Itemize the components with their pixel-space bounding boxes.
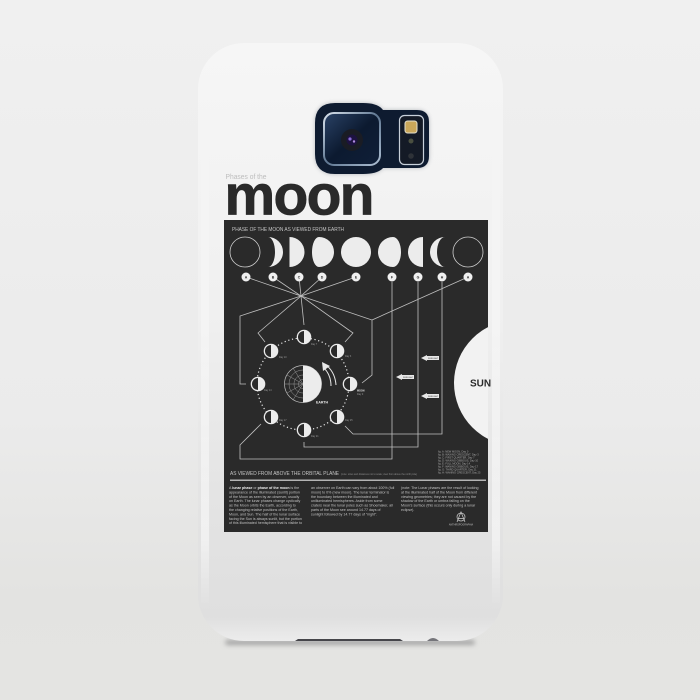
orbit day labels: Day 14	[264, 389, 272, 392]
sun label: SUN	[470, 378, 491, 390]
body text column 1: as the Moon orbits the Earth, according to	[229, 504, 296, 508]
phase legend: fig. E: FULL MOON, Day 14	[438, 462, 471, 466]
body text column 3	[401, 486, 478, 512]
body text column 3: at the illuminated half of the Moon from different	[401, 490, 477, 494]
orbit day labels: Day 17	[279, 419, 287, 422]
phase letter markers: C	[298, 275, 301, 279]
orbit path	[257, 338, 349, 430]
phase letter markers: B	[272, 275, 275, 279]
orbit day labels: Day 0	[357, 393, 364, 396]
body text column 3: Moon's surface (this occurs only during a lunar	[401, 504, 476, 508]
body text column 3: eclipse).	[401, 508, 414, 512]
sun	[454, 327, 488, 439]
orbit day labels: Day 10	[279, 356, 287, 359]
phase letter markers: E	[355, 275, 358, 279]
body text column 2: unilluminated hemispheres. Aside from some	[311, 499, 383, 503]
body text column 3: shadow of the Earth or umbra falling on the	[401, 499, 470, 503]
orbiting moons	[251, 330, 357, 437]
body text column 3: (note: The Lunar phases are the result of looking	[401, 486, 478, 490]
connector lines	[240, 277, 468, 459]
phase legend: fig. H: WANING CRESCENT, Day 25	[438, 470, 481, 474]
sunlight arrows: SUNLIGHT	[428, 358, 439, 360]
body text column 2	[311, 486, 395, 516]
phase legend: fig. F: WANING GIBBOUS, Day 17	[438, 464, 479, 468]
phase legend: fig. C: FIRST QUARTER, Day 7	[438, 456, 475, 460]
title word: moon	[224, 164, 374, 228]
title kicker: Phases of the	[226, 172, 266, 181]
phase legend: fig. A: NEW MOON, Day 0	[438, 450, 469, 454]
body text column 2: sunlight followed by 14.77 days of "night".	[311, 512, 377, 516]
headphone jack	[427, 638, 439, 641]
sunlight arrows	[396, 355, 439, 399]
phase letter markers: F	[391, 275, 394, 279]
body text column 1: appearance of the illuminated (sunlit) portion	[229, 490, 300, 494]
body text column 1: Moon, and Sun. The half of the lunar surface	[229, 512, 300, 516]
sunlight arrows: SUNLIGHT	[428, 396, 439, 398]
maker logo: ANTHROPOGRAPHIA	[449, 524, 474, 526]
body text column 1: of the Moon as seen by an observer, usually	[229, 495, 300, 499]
phase letter markers: A	[245, 275, 248, 279]
orbit day labels	[264, 343, 365, 438]
phase letter markers: D	[321, 275, 324, 279]
heading: viewed from earth: PHASE OF THE MOON AS VIEWED FROM EARTH	[232, 227, 344, 233]
orbit day labels: Day 7	[311, 343, 318, 346]
divider	[230, 480, 486, 481]
heading: orbital plane	[230, 471, 417, 477]
orbital plane note: (note: sizes and distances not to scale; view from above the north pole)	[341, 473, 417, 476]
body text column 1: the changing relative positions of the Earth,	[229, 508, 298, 512]
orbit day labels: Day 3	[345, 355, 352, 358]
camera module	[315, 103, 429, 174]
camera shadow	[315, 103, 429, 174]
phase legend: fig. G: THIRD QUARTER, Day 21	[438, 468, 477, 472]
phase letter markers: H	[441, 275, 444, 279]
phone case body	[198, 43, 503, 641]
phase legend: fig. D: WAXING GIBBOUS, Day 10	[438, 458, 479, 462]
body text column 2: craters near the lunar poles such as Shoemaker, all	[311, 504, 393, 508]
sunlight arrows: SUNLIGHT	[403, 377, 414, 379]
body text column 2: the boundary between the illuminated and	[311, 495, 378, 499]
earth	[284, 366, 329, 404]
phase letter markers	[242, 272, 472, 282]
body text column 3: viewing geometries; they are not caused by the	[401, 495, 476, 499]
phase legend	[438, 450, 481, 474]
top row moon phases	[230, 237, 483, 267]
phase letter markers: G	[417, 275, 420, 279]
heading: orbital plane: AS VIEWED FROM ABOVE THE ORBITAL PLANE	[230, 471, 339, 477]
body text column 1: facing the Sun is always sunlit, but the portion	[229, 517, 302, 521]
body text column 2: an observer on Earth can vary from about 100% (full	[311, 486, 395, 490]
orbit day labels: MOON	[357, 390, 365, 392]
maker logo	[449, 512, 474, 526]
title	[224, 164, 374, 228]
charging port	[295, 639, 403, 641]
phase legend: fig. B: WAXING CRESCENT, Day 3	[438, 452, 479, 456]
orbit day labels: Day 25	[345, 419, 353, 422]
body text column 1: on Earth. The lunar phases change cyclically	[229, 499, 300, 503]
orbit direction arrow	[322, 362, 336, 386]
case shadow	[225, 640, 475, 645]
body text column 1: A lunar phase or phase of the moon is the	[229, 486, 299, 490]
phase letter markers: A	[467, 275, 470, 279]
body text column 1	[229, 486, 302, 525]
orbit day labels: Day 21	[311, 435, 319, 438]
poster panel	[224, 220, 490, 532]
body text column 2: parts of the Moon see around 14.77 days of	[311, 508, 381, 512]
earth label: EARTH	[316, 400, 329, 404]
body text column 2: moon) to 0% (new moon). The lunar terminator is	[311, 490, 389, 494]
body text column 1: of this illuminated hemisphere that is visible to	[229, 521, 302, 525]
